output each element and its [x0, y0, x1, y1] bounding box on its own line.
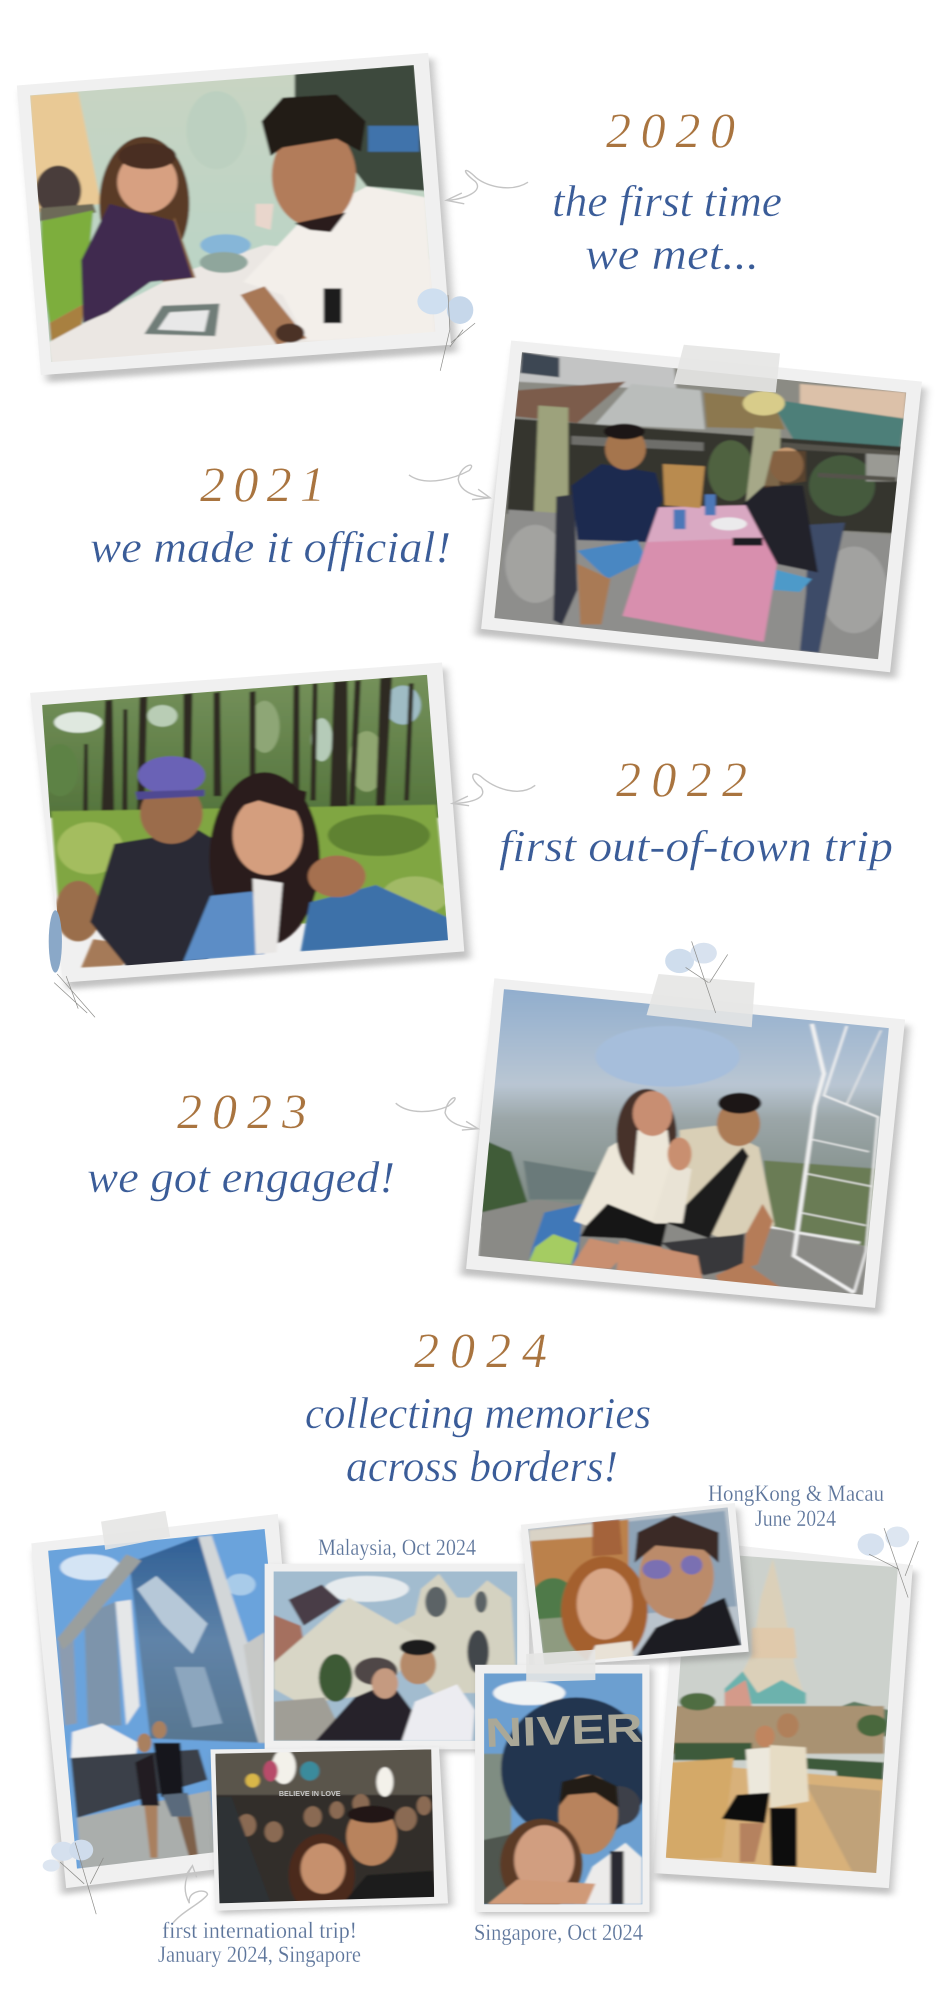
text: collecting memories across borders — [305, 1389, 651, 1491]
photo card: 2020 first meeting — [17, 53, 457, 383]
caption: Singapore: Singapore, Oct 2024 — [474, 1920, 643, 1945]
photo card: Universal Studios Singapore, Oct 2024 — [475, 1665, 653, 1915]
photo card: 2021 rooftop dinner — [475, 340, 926, 679]
photo card: 2022 pine forest selfie — [30, 663, 470, 989]
photo text: Universal sign: NIVER — [484, 1704, 643, 1756]
caption: first international trip — [158, 1918, 361, 1967]
icon: flower on 2020 photo — [417, 288, 475, 371]
photo card: Malaysia, Oct 2024 — [265, 1564, 533, 1752]
icon: lavender sprig on 2022 photo — [49, 910, 95, 1017]
text: collecting memories across borders: collecting memories — [305, 1389, 651, 1438]
icon: flower on 2023 photo — [665, 941, 728, 1013]
photo card: Marina Bay Sands, January 2024 — [31, 1514, 312, 1895]
caption: Hong Kong and Macau: June 2024 — [755, 1506, 836, 1531]
arrow: 2021 caption to photo — [409, 465, 490, 500]
text: the first time we met: we met... — [585, 230, 759, 279]
icon: flower top right — [858, 1526, 918, 1598]
heading: 2023: 2023 — [177, 1083, 307, 1139]
arrow: 2022 caption to photo — [452, 774, 535, 806]
heading: 2020: 2020 — [606, 102, 735, 158]
decoration: washi tape on Universal photo — [526, 1650, 595, 1682]
caption: Hong Kong and Macau — [708, 1481, 884, 1531]
caption: Malaysia: Malaysia, Oct 2024 — [318, 1535, 476, 1560]
heading: 2021: 2021 — [200, 456, 325, 512]
arrow: to first international trip photo — [171, 1866, 207, 1925]
decoration: washi tape on 2021 photo — [674, 345, 780, 392]
text: the first time we met — [552, 177, 782, 279]
text: the first time we met: the first time — [552, 177, 782, 226]
photo card: Hong Kong and Macau selfie — [521, 1503, 753, 1672]
caption: first international trip: first international trip! — [162, 1918, 357, 1943]
text: we got engaged: we got engaged! — [87, 1153, 395, 1202]
heading: 2024: 2024 — [414, 1322, 547, 1378]
decoration: washi tape on Marina Bay photo — [101, 1511, 170, 1550]
photo card: concert crowd — [210, 1747, 452, 1916]
decoration: washi tape on 2023 photo — [647, 974, 755, 1027]
icon: flower bottom left — [43, 1840, 103, 1914]
photo card: Hong Kong castle, June 2024 — [653, 1539, 917, 1895]
arrow: 2023 caption to photo — [396, 1098, 478, 1130]
heading: 2022: 2022 — [616, 751, 747, 807]
photo card: 2023 engagement on a hill — [460, 978, 909, 1314]
caption: first international trip: January 2024, Singapore — [158, 1942, 361, 1967]
photo text: concert sign: BELIEVE IN LOVE — [279, 1789, 341, 1798]
text: first out-of-town trip: first out-of-town trip — [499, 822, 893, 871]
text: we made it official: we made it official! — [90, 523, 451, 572]
arrow: 2020 caption to photo — [446, 170, 528, 204]
text: collecting memories across borders: across borders! — [346, 1442, 618, 1491]
caption: Hong Kong and Macau: HongKong & Macau — [708, 1481, 884, 1506]
